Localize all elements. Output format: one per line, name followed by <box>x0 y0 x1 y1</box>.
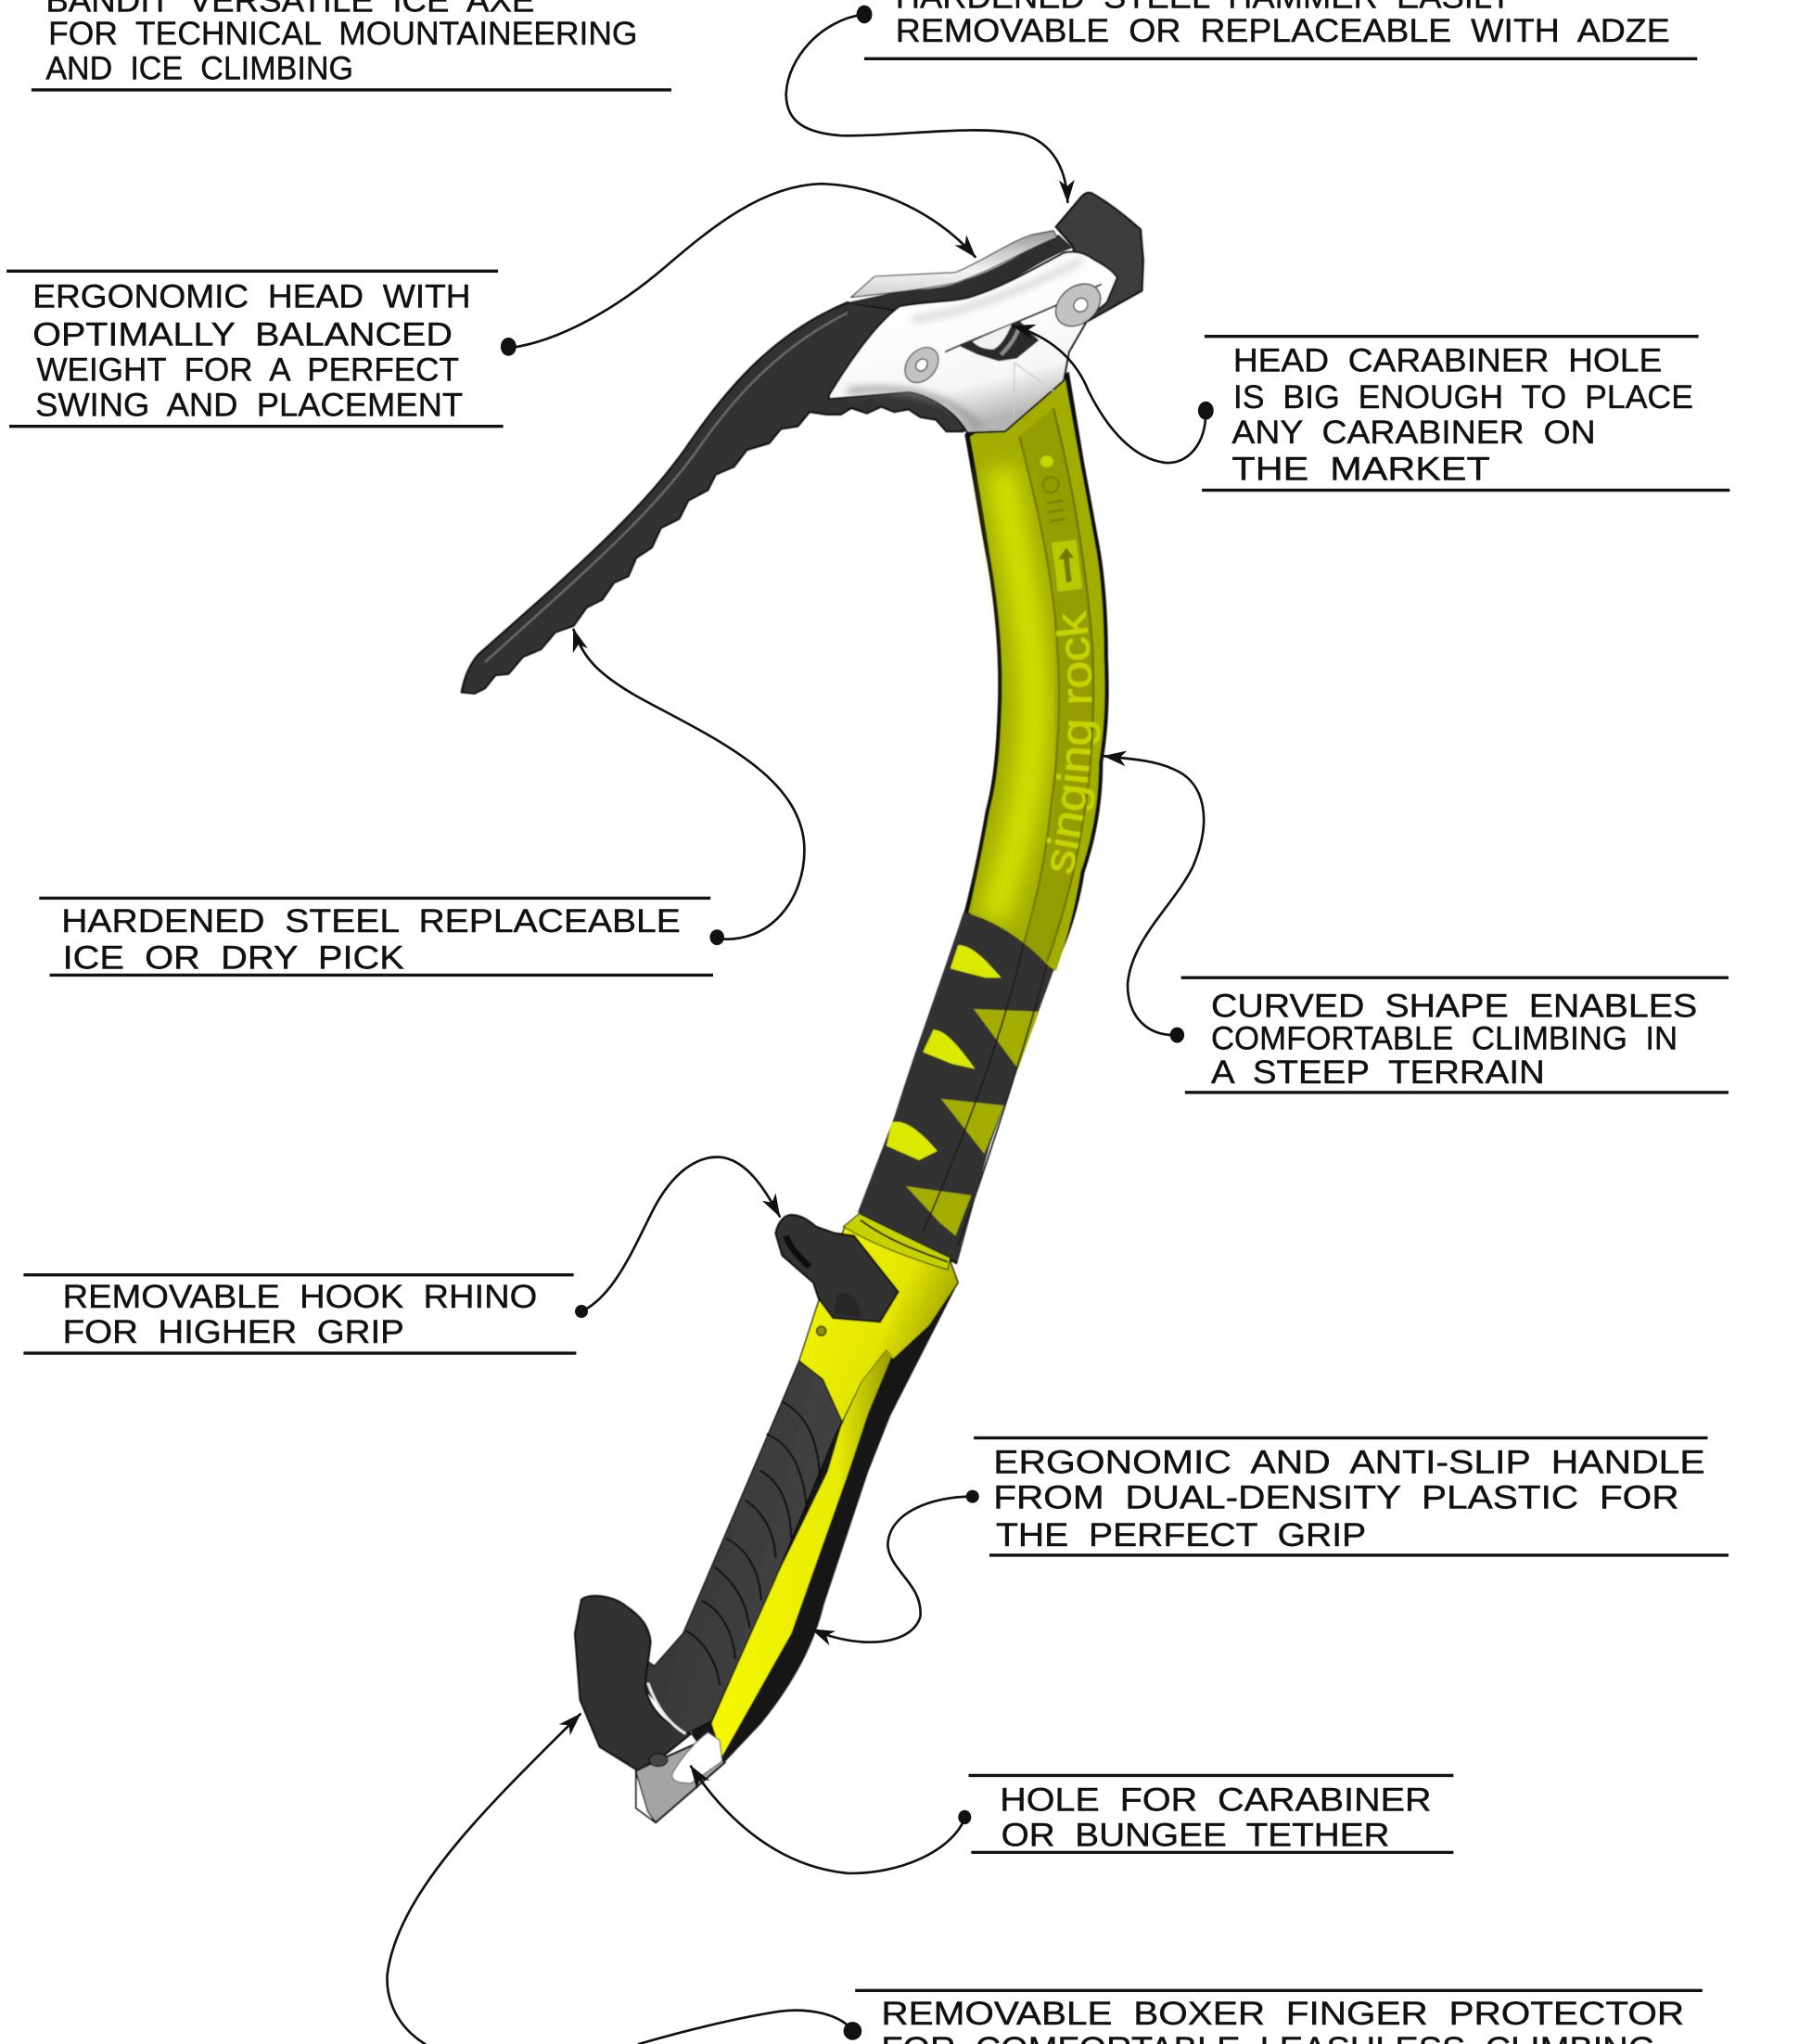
logo dot <box>1040 455 1053 467</box>
handle: black rear and bright yellow body <box>691 1214 958 1770</box>
callout: anti-slip handle: FROM DUAL-DENSITY PLASTIC FOR <box>993 1479 1679 1515</box>
callout: anti-slip handle: THE PERFECT GRIP <box>996 1517 1366 1553</box>
callout: ergonomic head: WEIGHT FOR A PERFECT <box>36 351 459 388</box>
callout: anti-slip handle: ERGONOMIC AND ANTI-SLIP HANDLE <box>993 1444 1705 1480</box>
callout: hook rhino <box>23 1157 780 1353</box>
pommel: gray spike and carabiner hole <box>636 1732 725 1822</box>
callout: tether hole: OR BUNGEE TETHER <box>1002 1817 1390 1853</box>
boxer finger protector <box>575 1596 691 1770</box>
callout: hammer: REMOVABLE OR REPLACEABLE WITH ADZE <box>896 13 1670 49</box>
arrow tag on shaft <box>1052 540 1082 592</box>
brand text <box>1072 607 1091 876</box>
ice axe illustration <box>460 191 1145 1824</box>
dark strip under top strip <box>848 235 1073 311</box>
grip: dual-density ribbed handle <box>639 1361 842 1735</box>
callout: ergonomic head: ERGONOMIC HEAD WITH <box>32 279 471 315</box>
callout: versatile ice axe: FOR TECHNICAL MOUNTAINEERING <box>48 16 637 52</box>
callout: boxer finger protector <box>387 1714 1703 2044</box>
yellow lower strip <box>712 1350 891 1756</box>
shaft: curved olive tube <box>822 352 1146 1280</box>
collar <box>844 1214 951 1270</box>
callout: head carabiner hole: THE MARKET <box>1231 451 1490 487</box>
arm edge <box>945 284 1102 352</box>
callout: tether hole: HOLE FOR CARABINER <box>1000 1782 1431 1818</box>
carabiner hole <box>672 1732 722 1783</box>
callout: replaceable pick: HARDENED STEEL REPLACEABLE <box>61 903 681 939</box>
black rear strip <box>691 1283 958 1770</box>
logo mark <box>1043 477 1065 521</box>
callout: ergonomic head: SWING AND PLACEMENT <box>35 387 463 423</box>
callout: tether hole <box>691 1767 1453 1873</box>
callout: ergonomic head: OPTIMALLY BALANCED <box>32 316 453 352</box>
left bolt <box>898 340 945 390</box>
top silver strip <box>851 231 1057 297</box>
head: silver casting with hammer <box>829 193 1143 433</box>
callout: curved shape: CURVED SHAPE ENABLES <box>1211 988 1697 1024</box>
callout: replaceable pick: ICE OR DRY PICK <box>63 939 404 976</box>
callout: anti-slip handle <box>812 1437 1729 1642</box>
callout: ergonomic head <box>6 184 976 427</box>
right bolt <box>1047 275 1109 335</box>
rivet <box>817 1326 826 1335</box>
head carabiner hole <box>958 321 1039 361</box>
callout: versatile ice axe: AND ICE CLIMBING <box>45 51 353 87</box>
callout: head carabiner hole: ANY CARABINER ON <box>1231 415 1596 451</box>
hammer <box>1056 193 1143 321</box>
callout: replaceable pick <box>39 630 804 976</box>
callout: hook rhino: REMOVABLE HOOK RHINO <box>63 1279 537 1315</box>
callout: boxer finger protector: REMOVABLE BOXER FINGER PROTECTOR <box>881 1996 1684 2032</box>
callout: head carabiner hole: IS BIG ENOUGH TO PLACE <box>1233 379 1693 415</box>
hook rhino <box>775 1215 899 1335</box>
grey shading <box>848 390 980 428</box>
callout: versatile ice axe <box>32 0 671 90</box>
callout: curved shape: COMFORTABLE CLIMBING IN <box>1211 1021 1678 1057</box>
pick: hardened steel blade with teeth <box>462 302 971 694</box>
callout: hook rhino: FOR HIGHER GRIP <box>63 1314 404 1350</box>
dark wrap band with yellow cut-outs <box>858 913 1053 1262</box>
callout: curved shape: A STEEP TERRAIN <box>1211 1054 1545 1091</box>
callout: curved shape <box>1104 756 1729 1092</box>
callout: head carabiner hole: HEAD CARABINER HOLE <box>1233 343 1662 379</box>
body <box>829 252 1117 433</box>
yellow upper body <box>799 1227 958 1423</box>
callout: head carabiner hole <box>1013 326 1729 491</box>
callout: hammer <box>786 0 1697 202</box>
shaft: curved olive tube: singing rock <box>1046 610 1101 874</box>
